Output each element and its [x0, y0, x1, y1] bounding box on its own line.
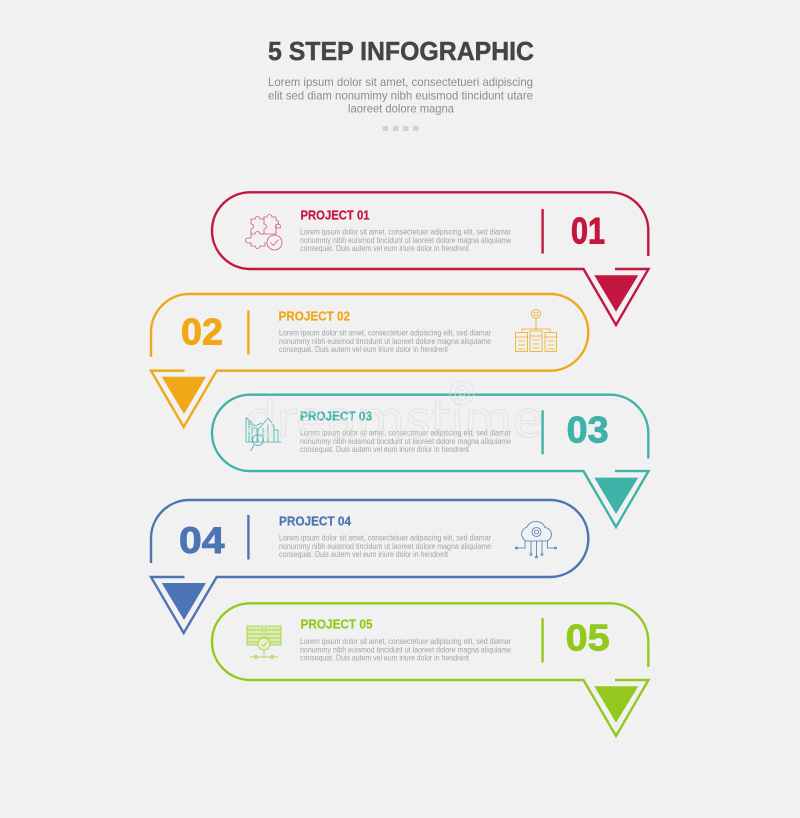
step 4 icon: cloud network [516, 521, 556, 558]
step 3 body text: consequat. Duis autem vel eum iriure dolor in hendrerit [300, 445, 470, 454]
step 2 number: 02 [181, 312, 223, 352]
step 1 body text: Lorem ipsum dolor sit amet, consectetuer adipiscing elit, sed diamar [300, 228, 511, 236]
step 2 body text: nonummy nibh euismod tincidunt ut laoreet dolore magna aliquiame [279, 337, 491, 346]
step 5 panel [212, 603, 648, 736]
step 4 divider [247, 515, 250, 560]
step 3 body text [300, 428, 511, 454]
title dots [382, 126, 418, 131]
step 2 body text: Lorem ipsum dolor sit amet, consectetuer adipiscing elit, sed diamar [279, 328, 491, 338]
step 2 arrow fill [162, 377, 206, 414]
step 1 icon: puzzle [246, 214, 282, 250]
step 2 body text: consequat. Duis autem vel eum iriure dolor in hendrerit [279, 345, 449, 354]
step 3 icon: chart with magnifier [246, 418, 281, 451]
step 4 arrow fill [162, 583, 206, 620]
step 2 icon: gear hierarchy [516, 310, 556, 352]
title: 5 STEP INFOGRAPHIC [268, 38, 534, 66]
step 1 heading: PROJECT 01 [300, 208, 370, 222]
step 1 number: 01 [571, 210, 605, 252]
subtitle text: elit sed diam nonumimy nibh euismod tincidunt utare [268, 90, 533, 102]
step 1 body text: nonummy nibh euismod tincidunt ut laoreet dolore magna aliquiame [300, 236, 511, 245]
step 2 heading: PROJECT 02 [278, 310, 350, 324]
step 4 number: 04 [179, 520, 225, 561]
step 2 body text [279, 328, 491, 354]
step 3 body text: nonummy nibh euismod tincidunt ut laoreet dolore magna aliquiame [300, 437, 511, 446]
step 3 panel [212, 395, 648, 527]
step 3 outline and arrow [212, 395, 648, 527]
step 5 heading: PROJECT 05 [300, 618, 372, 632]
step 4 panel [151, 500, 588, 633]
step 1 divider [541, 209, 544, 254]
step 5 body text: nonummy nibh euismod tincidunt ut laoreet dolore magna aliquiame [300, 645, 511, 654]
subtitle text [268, 76, 533, 116]
step 5 outline and arrow [212, 603, 648, 736]
step 4 body text [279, 534, 491, 559]
step 5 number: 05 [566, 618, 610, 658]
step 3 heading: PROJECT 03 [300, 410, 372, 424]
step 2 divider [247, 310, 250, 354]
watermark: dreamstime [245, 391, 543, 449]
step 2 panel [151, 294, 588, 427]
step 3 number: 03 [567, 410, 609, 450]
step 1 outline and arrow [212, 192, 648, 325]
step 5 body text: Lorem ipsum dolor sit amet, consectetuer adipiscing elit, sed diamar [300, 637, 511, 646]
step 4 body text: Lorem ipsum dolor sit amet, consectetuer adipiscing elit, sed diamar [279, 534, 491, 542]
step 1 body text [300, 228, 511, 253]
step 4 outline and arrow [151, 500, 588, 633]
step 1 body text: consequat. Duis autem vel eum iriure dolor in hendrerit [300, 244, 470, 253]
step 1 arrow fill [594, 275, 638, 312]
step 5 icon: server documents [247, 626, 281, 658]
step 3 arrow fill [594, 478, 638, 514]
step 3 body text: Lorem ipsum dolor sit amet, consectetuer adipiscing elit, sed diamar [300, 428, 511, 438]
step 5 body text: consequat. Duis autem vel eum iriure dolor in hendrerit [300, 654, 470, 662]
subtitle text: laoreet dolore magna [348, 102, 455, 116]
step 5 body text [300, 637, 511, 662]
step 1 panel [212, 192, 648, 325]
step 4 body text: nonummy nibh euismod tincidunt ut laoreet dolore magna aliquiame [279, 542, 491, 551]
step 5 divider [541, 618, 544, 662]
step 5 arrow fill [594, 686, 638, 723]
step 4 heading: PROJECT 04 [279, 514, 351, 528]
step 4 body text: consequat. Duis autem vel eum iriure dolor in hendrerit [279, 550, 449, 559]
step 3 divider [541, 410, 544, 454]
subtitle text: Lorem ipsum dolor sit amet, consectetueri adipiscing [268, 76, 533, 89]
step 2 outline and arrow [151, 294, 588, 427]
